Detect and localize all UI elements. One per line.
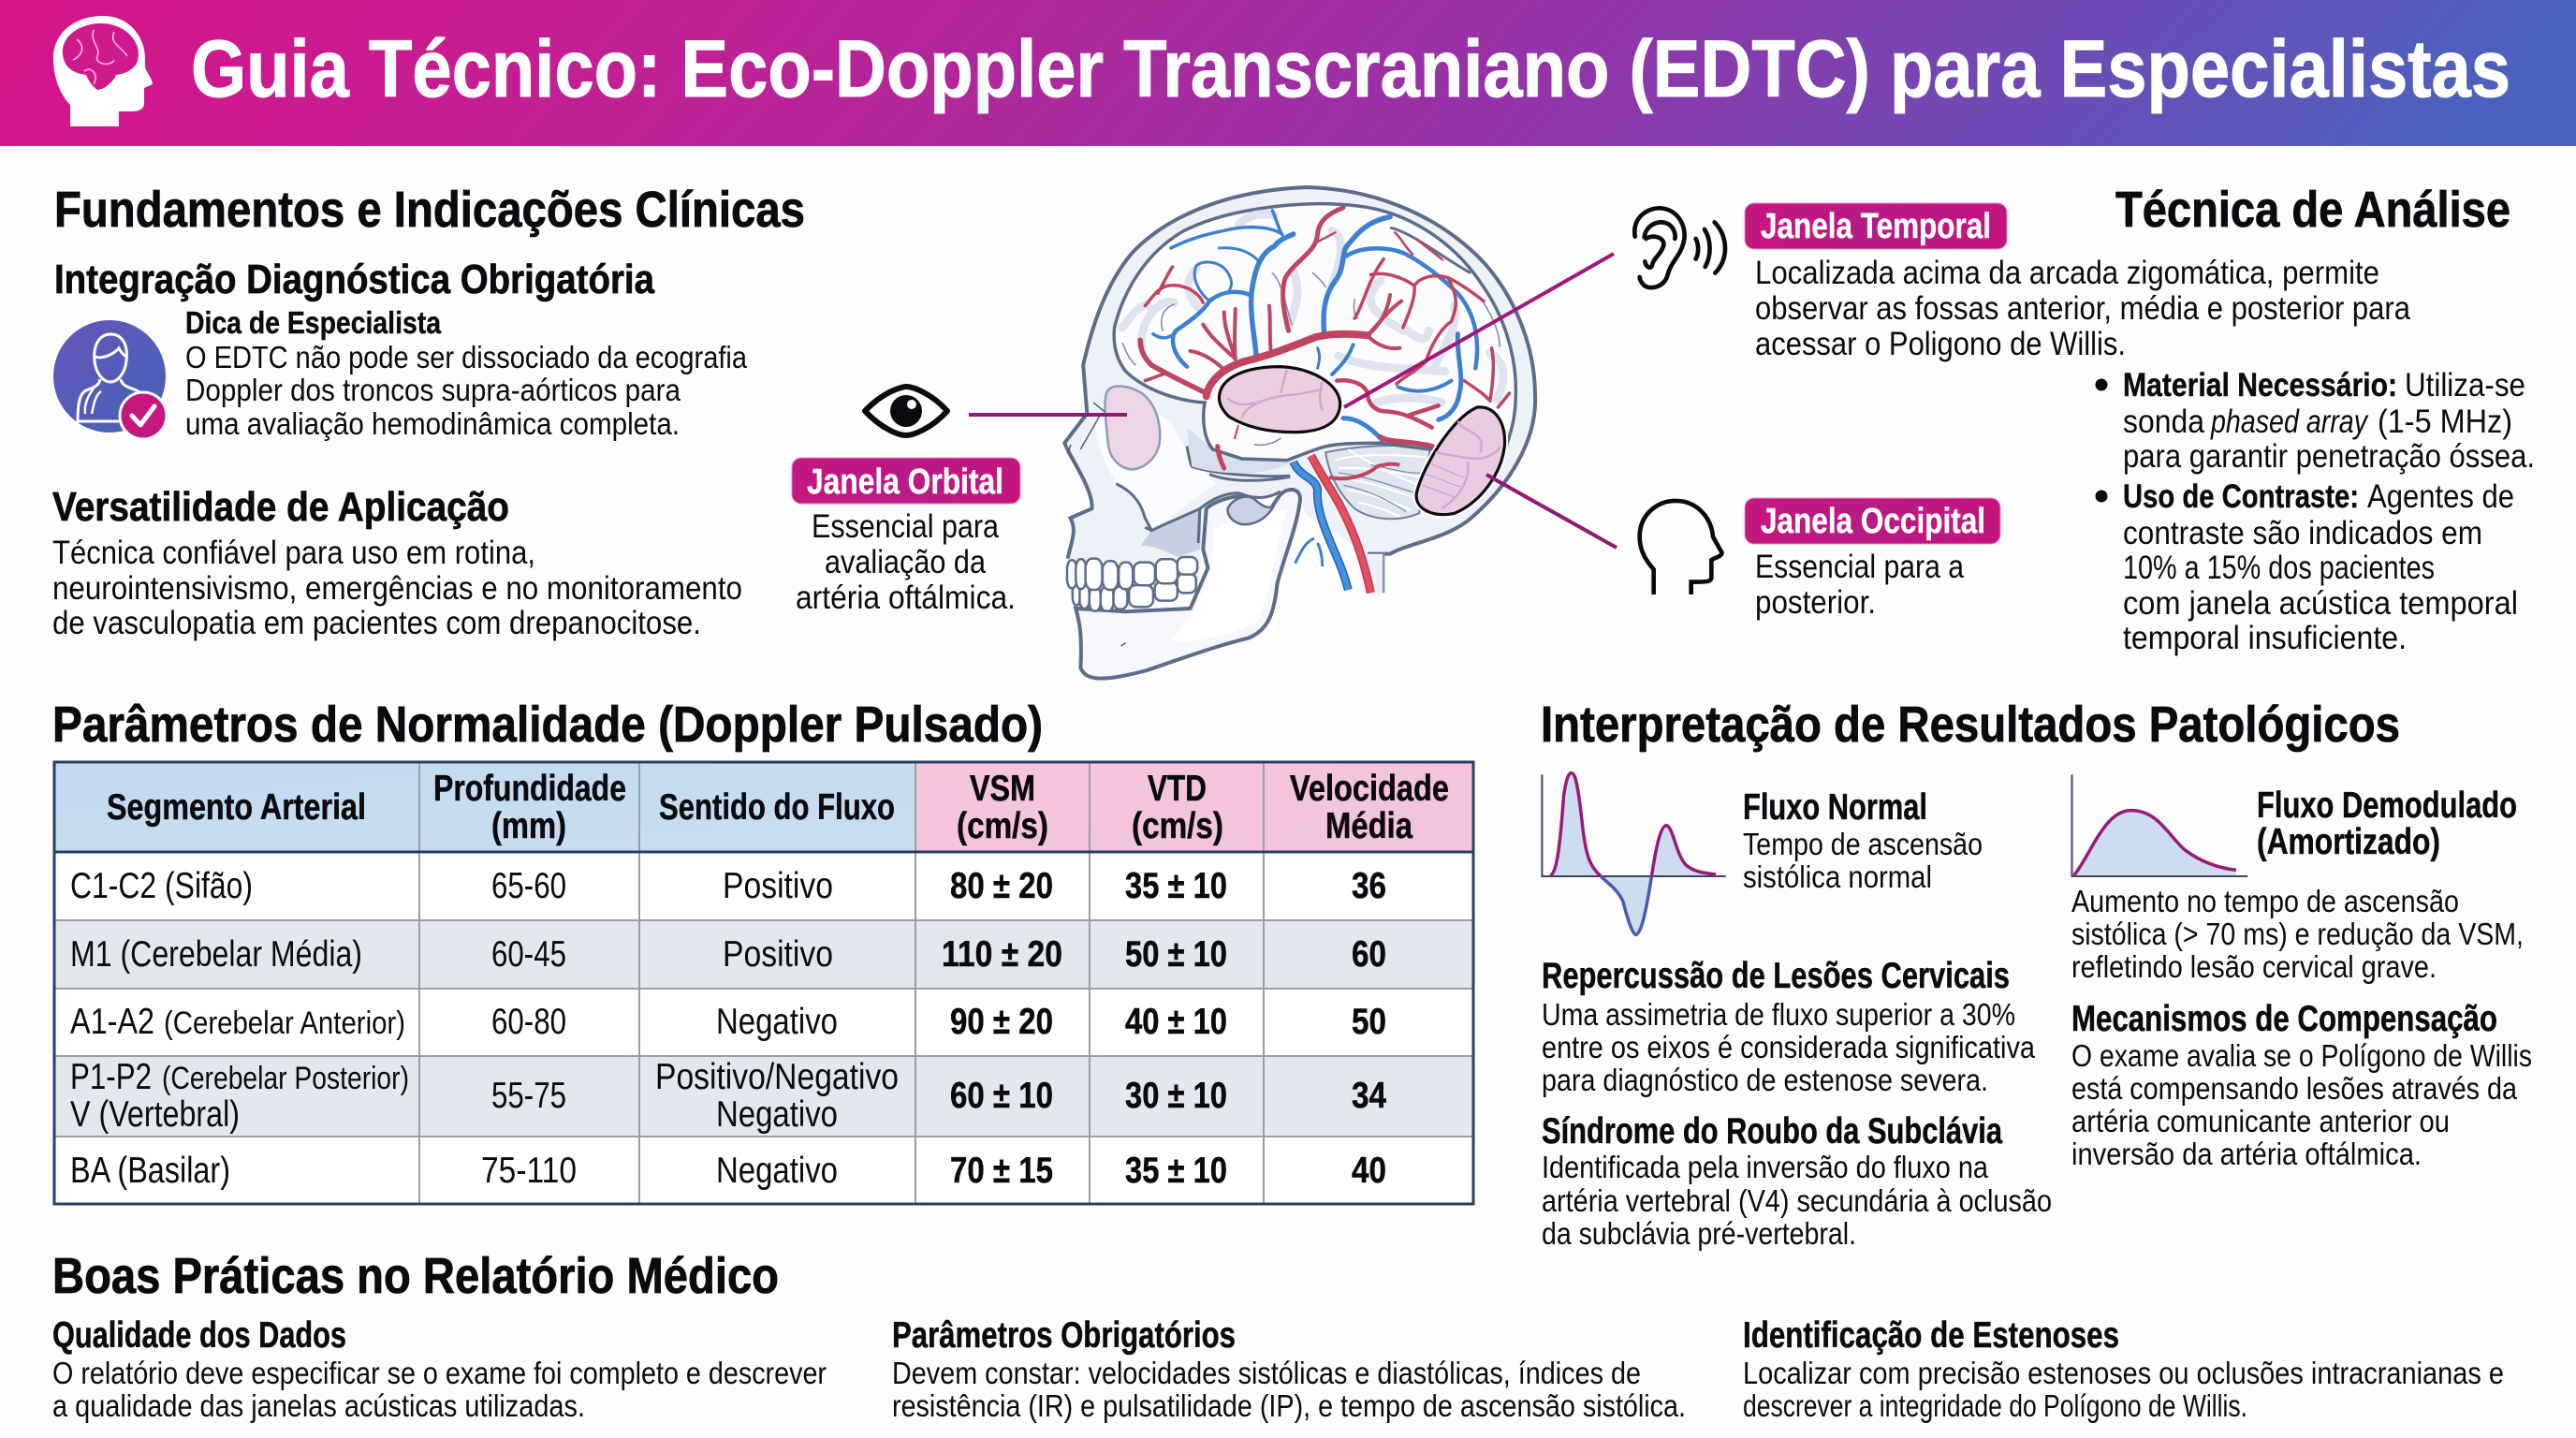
text: mecanismos: artéria comunicante anterior ou — [2071, 1104, 2450, 1138]
row: M1: 60-45 — [491, 934, 566, 975]
heading: técnica: Técnica de Análise — [2115, 182, 2510, 238]
row: BA: Negativo — [716, 1151, 838, 1191]
text: versatilidade: Técnica confiável para uso em rotina, — [52, 535, 535, 571]
text: temporal: Localizada acima da arcada zigomática, permite — [1755, 255, 2379, 291]
row: P1-P2 and V: (Cerebelar Posterior) — [162, 1061, 409, 1096]
badge: janela temporal: Janela Temporal — [1761, 207, 1991, 246]
gyri lines — [1122, 239, 1500, 445]
row: BA: 70 ± 15 — [950, 1151, 1053, 1191]
header banner — [0, 0, 2576, 146]
column: qualidade dos dados: a qualidade das janelas acústicas utilizadas. — [52, 1388, 585, 1423]
text: síndrome do roubo: Síndrome do Roubo da Subclávia — [1542, 1111, 2002, 1152]
bullet: contraste: com janela acústica temporal — [2123, 585, 2518, 622]
bullet: material: sonda — [2123, 404, 2204, 440]
text: repercussão: para diagnóstico de estenose severa. — [1542, 1063, 1988, 1097]
skull outer outline — [1064, 187, 1535, 559]
text: fluxo normal: sistólica normal — [1743, 859, 1932, 894]
text: occipital: posterior. — [1755, 584, 1876, 621]
spinal column — [1358, 554, 1383, 593]
arrow: orbital line — [969, 413, 1127, 417]
icon: ear — [1634, 208, 1725, 287]
row: C1-C2: 35 ± 10 — [1125, 866, 1227, 906]
row: P1-P2 and V: V (Vertebral) — [70, 1094, 240, 1135]
red vessels — [1140, 208, 1509, 468]
panel: fundamentos — [52, 182, 805, 641]
brain — [1114, 204, 1515, 461]
text: orbital: Essencial para — [812, 508, 999, 545]
text: mecanismos: inversão da artéria oftálmica. — [2071, 1137, 2422, 1171]
heading: interpretação: Interpretação de Resultados Patológicos — [1541, 697, 2400, 753]
row: M1: 50 ± 10 — [1125, 934, 1227, 975]
bullet: contraste: temporal insuficiente. — [2123, 620, 2407, 656]
tip text: uma avaliação hemodinâmica completa. — [185, 406, 680, 441]
text: orbital — [796, 508, 1016, 616]
column: parâmetros obrigatórios: resistência (IR) e pulsatilidade (IP), e tempo de ascensão sistólica. — [892, 1388, 1686, 1423]
column: qualidade dos dados — [52, 1315, 827, 1423]
text: temporal — [1755, 255, 2410, 362]
text: fluxo normal: Fluxo Normal — [1743, 787, 1927, 828]
text: síndrome do roubo — [1542, 1111, 2052, 1251]
table header: Sentido do Fluxo — [659, 787, 895, 828]
chart: fluxo demodulado waveform — [2071, 774, 2247, 876]
table header: (cm/s) — [957, 806, 1048, 846]
tip text — [185, 305, 748, 441]
bullet: contraste: contraste são indicados em — [2123, 515, 2482, 551]
icon: doctor badge — [53, 320, 167, 439]
panel: técnica de análise — [2095, 182, 2535, 656]
text: repercussão — [1542, 956, 2036, 1097]
row: P1-P2 and V: 30 ± 10 — [1125, 1076, 1227, 1116]
row: P1-P2 and V: 34 — [1352, 1076, 1386, 1116]
row: C1-C2: 36 — [1352, 866, 1386, 906]
row: A1-A2: Negativo — [716, 1002, 838, 1042]
heading: parâmetros: Parâmetros de Normalidade (Doppler Pulsado) — [52, 697, 1043, 753]
subheading: versatilidade: Versatilidade de Aplicação — [52, 484, 509, 530]
bullet: contraste: Agentes de — [2367, 478, 2514, 515]
arrow: occipital line — [1486, 475, 1617, 548]
orbit — [1105, 386, 1160, 470]
row: C1-C2: 80 ± 20 — [950, 866, 1053, 906]
subheading: integração: Integração Diagnóstica Obrigatória — [54, 257, 654, 302]
row: C1-C2: C1-C2 (Sifão) — [70, 866, 253, 906]
text: temporal: observar as fossas anterior, média e posterior para — [1755, 290, 2410, 327]
row: P1-P2 and V — [70, 1057, 1386, 1135]
bullet: contraste — [2095, 478, 2518, 656]
panel: interpretação de resultados — [1541, 697, 2532, 1251]
row: BA: 40 — [1352, 1151, 1386, 1191]
row: A1-A2: 50 — [1352, 1002, 1386, 1042]
row: M1: 60 — [1352, 934, 1386, 975]
row: M1: Positivo — [723, 934, 833, 975]
icon: eye — [865, 387, 947, 435]
column: parâmetros obrigatórios — [892, 1315, 1686, 1423]
tip text: O EDTC não pode ser dissociado da ecografia — [185, 340, 748, 374]
row: P1-P2 and V: Negativo — [716, 1094, 838, 1135]
bullet: material: Utiliza-se — [2405, 367, 2525, 404]
table header: (mm) — [491, 806, 566, 846]
table header: VSM — [970, 769, 1035, 809]
arrow: temporal line — [1344, 254, 1614, 407]
badge: janela occipital: Janela Occipital — [1761, 502, 1985, 541]
row: M1: 110 ± 20 — [942, 934, 1062, 975]
table header: (cm/s) — [1132, 806, 1223, 846]
text: versatilidade: de vasculopatia em pacientes com drepanocitose. — [52, 605, 701, 641]
row: C1-C2: 65-60 — [491, 866, 566, 906]
bullet: material — [2095, 367, 2535, 475]
text: orbital: avaliação da — [825, 544, 986, 580]
text: mecanismos: está compensando lesões através da — [2071, 1071, 2518, 1106]
teeth — [1067, 557, 1197, 611]
mandible — [1076, 490, 1300, 679]
gyri shading — [1122, 214, 1503, 403]
text: fluxo demodulado: Fluxo Demodulado — [2257, 785, 2517, 826]
table header: VTD — [1148, 769, 1207, 809]
text: fluxo normal: Tempo de ascensão — [1743, 827, 1983, 861]
face white highlight — [1096, 408, 1216, 531]
bullet: material: Material Necessário: — [2123, 367, 2397, 404]
text: orbital: artéria oftálmica. — [796, 580, 1016, 616]
cerebellum — [1325, 446, 1430, 519]
text: versatilidade — [52, 535, 742, 641]
table header: Segmento Arterial — [107, 787, 366, 828]
heading: boas práticas: Boas Práticas no Relatório Médico — [52, 1248, 779, 1304]
row: P1-P2 and V: 55-75 — [491, 1076, 566, 1116]
illustration: skull and brain — [1064, 187, 1535, 679]
panel: boas práticas — [52, 1248, 2504, 1423]
row: BA — [70, 1151, 1386, 1191]
column: qualidade dos dados: O relatório deve especificar se o exame foi completo e descrever — [52, 1356, 827, 1390]
text: versatilidade: neurointensivismo, emergências e no monitoramento — [52, 570, 742, 607]
row: A1-A2: 40 ± 10 — [1125, 1002, 1227, 1042]
occipital window — [1416, 407, 1505, 515]
blue vessels — [1153, 211, 1477, 440]
occipital window group — [1640, 498, 2000, 621]
condyle — [1227, 497, 1274, 524]
bullet: contraste: Uso de Contraste: — [2123, 478, 2359, 515]
column: identificação de estenoses: Identificação de Estenoses — [1743, 1315, 2119, 1356]
table: parâmetros de normalidade — [54, 762, 1473, 1204]
table header: Velocidade — [1290, 769, 1449, 809]
row: C1-C2: Positivo — [723, 866, 833, 906]
row: BA: 75-110 — [481, 1151, 577, 1191]
column: identificação de estenoses: descrever a integridade do Polígono de Willis. — [1743, 1388, 2247, 1423]
text: síndrome do roubo: artéria vertebral (V4) secundária à oclusão — [1542, 1183, 2052, 1218]
skull base fill — [1064, 187, 1535, 609]
row: A1-A2: (Cerebelar Anterior) — [164, 1005, 405, 1041]
bullet: material: phased array — [2210, 404, 2369, 440]
table header: Profundidade — [433, 769, 626, 809]
heading: fundamentos: Fundamentos e Indicações Clínicas — [54, 182, 805, 238]
column: qualidade dos dados: Qualidade dos Dados — [52, 1315, 346, 1356]
text: occipital: Essencial para a — [1755, 549, 1964, 585]
table header: Média — [1325, 806, 1412, 846]
row: A1-A2: 60-80 — [491, 1002, 566, 1042]
row: P1-P2 and V: Positivo/Negativo — [655, 1057, 899, 1097]
text: fluxo normal — [1743, 787, 1983, 894]
maxilla shadow — [1140, 508, 1201, 557]
text: temporal: acessar o Poligono de Willis. — [1755, 326, 2126, 362]
row: C1-C2 — [70, 866, 1386, 906]
text: mecanismos — [2071, 999, 2532, 1171]
row: BA: 35 ± 10 — [1125, 1151, 1227, 1191]
row: P1-P2 and V: P1-P2 — [70, 1057, 152, 1097]
icon: head with brain — [53, 16, 153, 126]
badge: janela orbital: Janela Orbital — [807, 462, 1003, 502]
row: A1-A2: 90 ± 20 — [950, 1002, 1053, 1042]
sphenoid shading — [1187, 428, 1290, 473]
icon: head — [1640, 501, 1721, 594]
column: identificação de estenoses — [1743, 1315, 2504, 1423]
bullet: material: (1-5 MHz) — [2378, 404, 2512, 440]
chart: fluxo normal waveform — [1542, 773, 1726, 934]
bullet: contraste: 10% a 15% dos pacientes — [2123, 550, 2435, 586]
text: fluxo demodulado: (Amortizado) — [2257, 822, 2440, 862]
text: fluxo demodulado: refletindo lesão cervical grave. — [2071, 949, 2437, 984]
tip text: Dica de Especialista — [185, 305, 442, 340]
mandible highlight — [1171, 508, 1287, 641]
row: M1: M1 (Cerebelar Média) — [70, 934, 362, 975]
row: BA: BA (Basilar) — [70, 1151, 230, 1191]
text: repercussão: Repercussão de Lesões Cervicais — [1542, 956, 2010, 996]
text: fluxo demodulado: Aumento no tempo de ascensão — [2071, 884, 2459, 918]
bullet: material: para garantir penetração óssea. — [2123, 438, 2535, 475]
row: P1-P2 and V: 60 ± 10 — [950, 1076, 1053, 1116]
text: fluxo demodulado — [2071, 785, 2524, 984]
temporal window — [1219, 367, 1340, 433]
row: A1-A2: A1-A2 — [70, 1002, 154, 1042]
orbital window group — [792, 387, 1127, 616]
nasal detail — [1068, 403, 1126, 646]
temporal window group — [1634, 203, 2410, 362]
cervical arteries — [1294, 456, 1399, 593]
text: repercussão: entre os eixos é considerada significativa — [1542, 1030, 2036, 1064]
column: parâmetros obrigatórios: Devem constar: velocidades sistólicas e diastólicas, índices de — [892, 1356, 1641, 1390]
text: síndrome do roubo: da subclávia pré-vertebral. — [1542, 1216, 1856, 1251]
table header — [107, 769, 1449, 846]
zygomatic lines — [1116, 447, 1290, 543]
row: M1 — [70, 934, 1386, 975]
text: síndrome do roubo: Identificada pela inversão do fluxo na — [1542, 1150, 1989, 1184]
text: repercussão: Uma assimetria de fluxo superior a 30% — [1542, 997, 2015, 1032]
text: occipital — [1755, 549, 1964, 621]
tip text: Doppler dos troncos supra-aórticos para — [185, 373, 681, 407]
column: parâmetros obrigatórios: Parâmetros Obrigatórios — [892, 1315, 1236, 1356]
row: A1-A2 — [70, 1002, 1386, 1042]
